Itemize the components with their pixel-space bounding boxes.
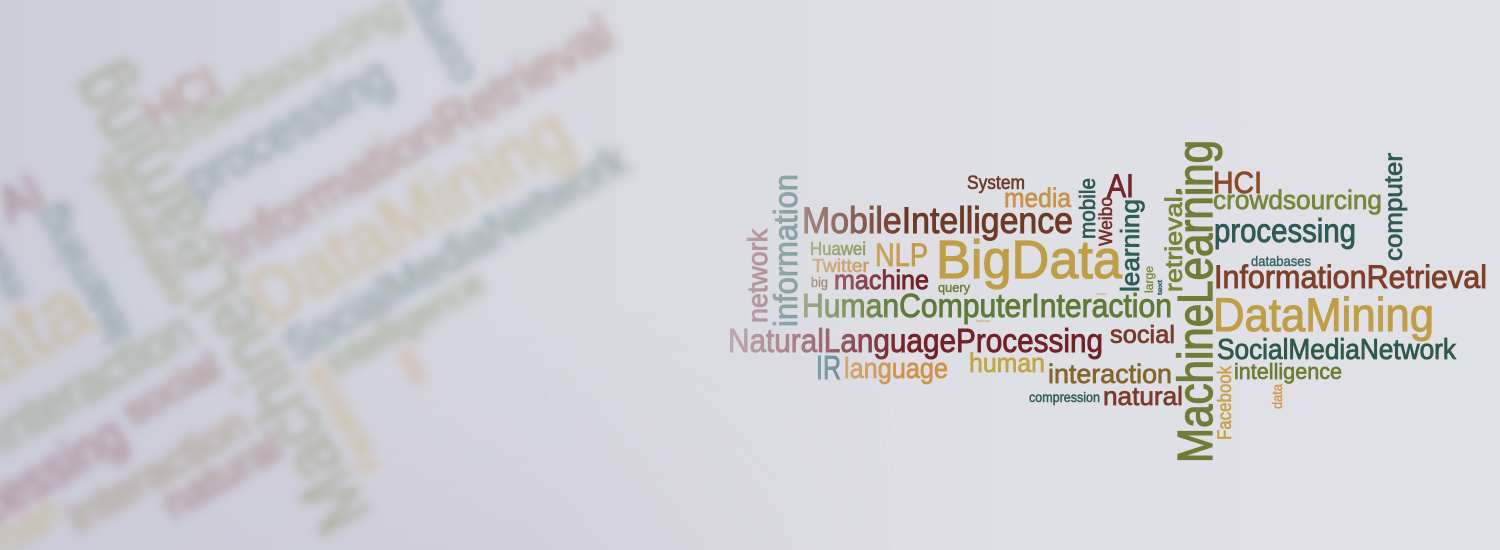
word: data: data <box>1269 384 1285 409</box>
blurred rotated word cloud <box>0 0 759 550</box>
word: Huawei: Huawei <box>810 239 866 259</box>
word: compression: compression <box>1029 389 1100 405</box>
word: natural: natural <box>1103 381 1183 411</box>
word: Weibo: Weibo <box>1096 197 1116 246</box>
word: machine: machine <box>834 265 929 295</box>
word: IR: IR <box>816 349 841 386</box>
blurred rotated word cloud: Facebook <box>296 358 387 479</box>
word: System: System <box>967 173 1025 194</box>
word: crowdsourcing: crowdsourcing <box>1213 185 1382 215</box>
blurred rotated word cloud: retrieval. <box>79 148 200 314</box>
background gradient <box>0 0 768 550</box>
blurred rotated word cloud: learning <box>24 197 140 351</box>
word: media: media <box>1004 183 1072 213</box>
word: tiny vertical term: text <box>1158 279 1164 295</box>
word: DataMining: DataMining <box>1213 288 1434 341</box>
word: network: network <box>742 228 773 323</box>
word: SocialMediaNetwork: SocialMediaNetwork <box>1217 334 1456 366</box>
word: mobile: mobile <box>1075 178 1100 239</box>
word: NLP: NLP <box>875 237 928 273</box>
blurred rotated word cloud: InformationRetrieval <box>210 4 622 275</box>
word: processing: processing <box>1214 212 1356 249</box>
blurred rotated word cloud: natural <box>154 422 290 528</box>
word: HCI: HCI <box>1213 165 1262 200</box>
blurred rotated word cloud: data <box>389 343 432 391</box>
word: big: big <box>811 274 828 290</box>
word: query: query <box>938 280 970 295</box>
word: MachineLearning: MachineLearning <box>1169 140 1223 463</box>
word: databases: databases <box>1251 253 1311 269</box>
word: language: language <box>844 353 948 385</box>
blurred rotated word cloud: processing <box>173 46 402 212</box>
word: HumanComputerInteraction: HumanComputerInteraction <box>802 287 1172 324</box>
blurred rotated word cloud: social <box>114 343 228 435</box>
blurred rotated word cloud: intelligence <box>320 262 491 384</box>
word: retrieval: retrieval. <box>1161 189 1188 292</box>
word: BigData: BigData <box>936 230 1123 290</box>
word: Facebook: Facebook <box>1215 366 1236 440</box>
word: learning: learning <box>1115 199 1145 292</box>
word: computer: computer <box>1380 153 1408 261</box>
word: AI: AI <box>1107 168 1134 204</box>
word cloud <box>728 140 1487 463</box>
word: hashtags: hashtags <box>976 318 990 323</box>
blurred rotated word cloud: HCI <box>133 55 230 143</box>
word: information: information <box>767 174 804 327</box>
blurred rotated word cloud: interaction <box>59 399 257 542</box>
blurred rotated word cloud: SocialMediaNetwork <box>274 132 636 372</box>
word: InformationRetrieval: InformationRetrieval <box>1214 259 1487 295</box>
word: NaturalLanguageProcessing: NaturalLanguageProcessing <box>728 322 1103 359</box>
blurred rotated word cloud: DataMining <box>233 89 586 342</box>
word: example: example <box>1096 291 1108 296</box>
word: intelligence: intelligence <box>1234 359 1342 384</box>
word: MobileIntelligence: MobileIntelligence <box>802 200 1073 241</box>
word: Twitter: Twitter <box>812 256 869 276</box>
word: large: large <box>1142 266 1156 293</box>
word: human: human <box>969 348 1045 378</box>
word: interaction: interaction <box>1048 359 1172 389</box>
word: social: social <box>1110 321 1175 349</box>
